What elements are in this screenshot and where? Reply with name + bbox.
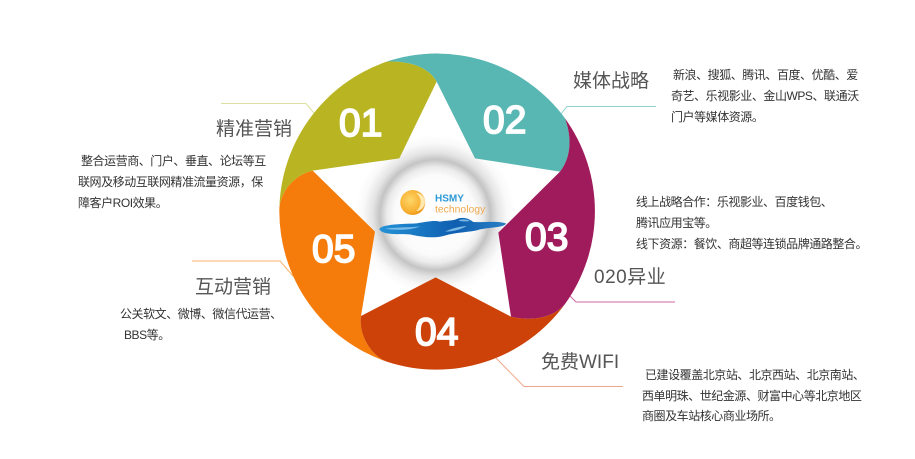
heading: 精准营销 xyxy=(216,118,292,140)
heading: 020异业 xyxy=(594,266,666,288)
description xyxy=(671,67,859,124)
centre logo xyxy=(379,190,506,237)
panel: 02 媒体战略 xyxy=(573,67,859,124)
description: 商圈及车站核心商业场所。 xyxy=(642,408,781,423)
leader line: 01 xyxy=(221,104,314,113)
description: BBS等。 xyxy=(124,328,170,342)
description xyxy=(78,153,266,210)
panel: 04 免费WIFI xyxy=(541,351,864,423)
description: 整合运营商、门户、垂直、论坛等互 xyxy=(81,153,266,168)
description: 障客户ROI效果。 xyxy=(78,195,167,210)
pinwheel star diagram xyxy=(279,54,595,370)
description xyxy=(636,194,867,251)
description: 已建设覆盖北京站、北京西站、北京南站、 xyxy=(645,367,864,382)
number 04: 04 xyxy=(415,311,458,354)
leader line: 05 xyxy=(192,261,293,276)
description: 公关软文、微博、微信代运营、 xyxy=(120,306,282,321)
number 01: 01 xyxy=(339,102,382,145)
panel: 03 020异业 xyxy=(594,194,867,288)
description: 西单明珠、世纪金源、财富中心等北京地区 xyxy=(642,388,862,403)
leader line: 03 xyxy=(569,295,675,302)
description: 腾讯应用宝等。 xyxy=(636,215,717,230)
description: 新浪、搜狐、腾讯、百度、优酷、爱 xyxy=(673,67,858,82)
star centre with glow xyxy=(313,82,560,317)
number 05: 05 xyxy=(312,228,355,271)
description: 奇艺、乐视影业、金山WPS、联通沃 xyxy=(671,88,859,103)
segment 05 orange xyxy=(279,171,387,362)
description: 联网及移动互联网精准流量资源，保 xyxy=(78,175,263,189)
logo word HSMY: HSMY xyxy=(435,194,464,204)
icon: sun xyxy=(400,190,425,215)
description xyxy=(120,306,282,342)
heading: 免费WIFI xyxy=(541,351,619,373)
icon: water xyxy=(379,218,506,237)
heading: 互动营销 xyxy=(195,276,271,298)
segment 03 purple xyxy=(498,118,595,319)
leader line: 04 xyxy=(496,358,623,386)
description: 线上战略合作：乐视影业、百度钱包、 xyxy=(636,194,832,209)
description: 门户等媒体资源。 xyxy=(671,109,763,124)
panel: 01 精准营销 xyxy=(78,118,292,210)
description: 线下资源：餐饮、商超等连锁品牌通路整合。 xyxy=(636,236,867,251)
panel: 05 互动营销 xyxy=(120,276,282,342)
description xyxy=(642,367,864,423)
number 02: 02 xyxy=(483,99,526,142)
segment 01 olive xyxy=(279,61,437,210)
leader line: 02 xyxy=(561,106,656,114)
number 03: 03 xyxy=(525,216,568,259)
segment 02 teal xyxy=(387,54,570,172)
segment 04 red-orange xyxy=(361,277,565,370)
heading: 媒体战略 xyxy=(573,70,649,92)
logo word technology: technology xyxy=(435,204,486,216)
